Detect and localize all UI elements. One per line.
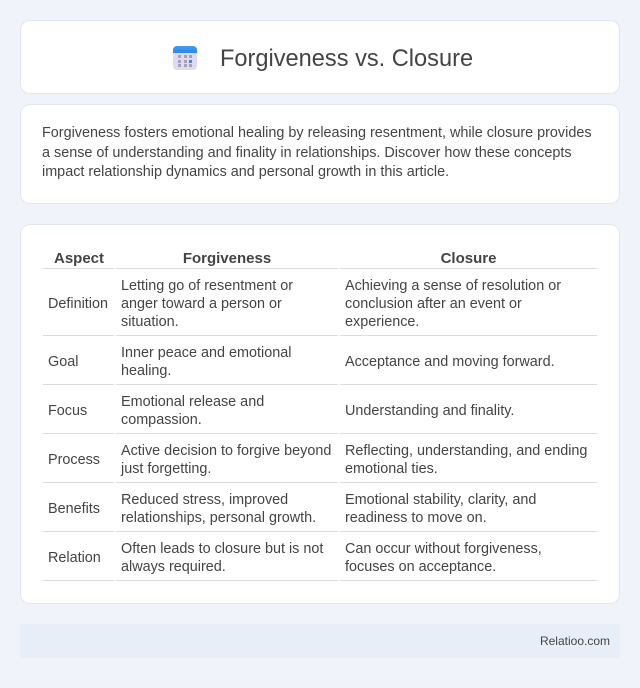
text: experience. [345,314,419,330]
text: Goal [48,354,78,370]
text: Inner peace and emotional [121,345,291,361]
text: conclusion after an event or [345,296,522,312]
text: Letting go of resentment or [121,278,293,294]
comparison table panel [20,224,620,604]
text: Aspect [54,250,104,267]
text: Benefits [48,501,100,517]
row: process [43,443,597,483]
text: healing. [121,363,171,379]
text: Can occur without forgiveness, [345,541,542,557]
text: Forgiveness [183,250,271,267]
row: goal [43,345,597,385]
text: Reduced stress, improved [121,492,288,508]
text: Acceptance and moving forward. [345,354,555,370]
text: Emotional stability, clarity, and [345,492,536,508]
text: readiness to move on. [345,510,487,526]
row: benefits [43,492,597,532]
title panel [20,20,620,94]
text: Achieving a sense of resolution or [345,278,561,294]
text: relationships, personal growth. [121,510,316,526]
row: relation [43,541,597,581]
text: compassion. [121,412,202,428]
text: Relation [48,550,101,566]
text: situation. [121,314,179,330]
text: emotional ties. [345,461,438,477]
intro text: impact relationship dynamics and personal growth in this article. [42,164,449,180]
text: Often leads to closure but is not [121,541,323,557]
text: anger toward a person or [121,296,282,312]
text: focuses on acceptance. [345,559,496,575]
text: Emotional release and [121,394,264,410]
intro text [42,125,592,180]
footer bar [20,624,620,658]
text: Process [48,452,100,468]
text: Focus [48,403,87,419]
text: Understanding and finality. [345,403,514,419]
intro text: Forgiveness fosters emotional healing by releasing resentment, while closure provides [42,125,592,141]
comparison table [43,250,597,581]
title: Forgiveness vs. Closure [220,46,473,72]
intro panel [20,104,620,204]
text: just forgetting. [121,461,211,477]
text: Active decision to forgive beyond [121,443,331,459]
row: focus [43,394,597,434]
intro text: a sense of understanding and finality in relationships. Discover how these concepts [42,144,572,160]
table header [43,250,597,269]
footer brand: Relatioo.com [540,634,610,648]
text: Reflecting, understanding, and ending [345,443,587,459]
text: Closure [441,250,496,267]
row: definition [43,278,597,336]
text: Definition [48,296,108,312]
icon: calendar [173,46,197,70]
text: always required. [121,559,226,575]
